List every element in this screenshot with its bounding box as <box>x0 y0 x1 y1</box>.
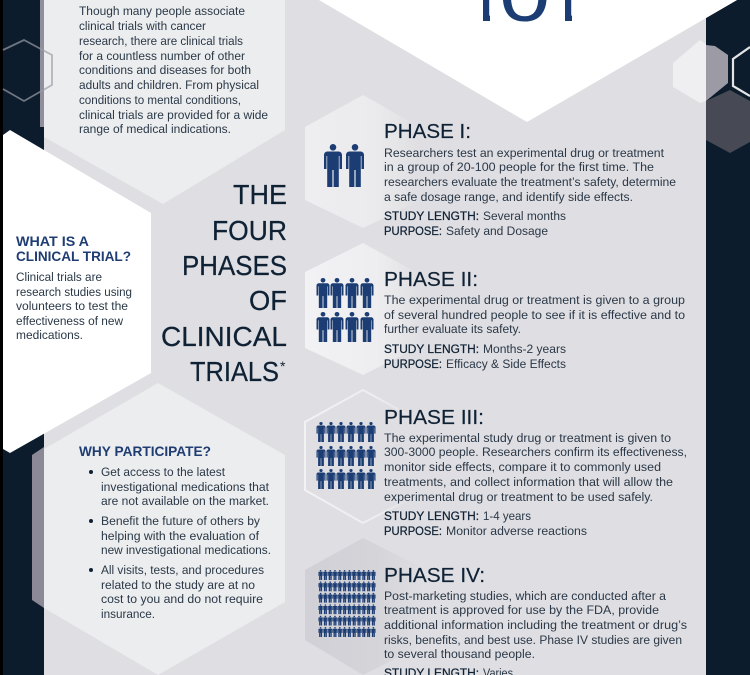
panel: why participate hexagon <box>44 383 285 675</box>
text block: phase IV: risks, benefits, and best use. Phase IV studies are given <box>384 633 682 647</box>
text block: phase III: experimental drug or treatment to be used safely. <box>384 490 653 504</box>
text block: phase I: in a group of 20-100 people for the first time. The <box>384 160 654 174</box>
text block: phase II: further evaluate its safety. <box>384 322 521 336</box>
text block: why participate: helping with the evaluation of <box>101 529 260 543</box>
icon: eight people <box>316 278 374 342</box>
text block: intro: range of medical indications. <box>79 122 231 136</box>
left edge strip <box>0 0 3 675</box>
decorative hexagon: outline right <box>733 47 750 96</box>
panel: intro hexagon <box>44 0 285 204</box>
side strip: why participate <box>32 447 44 608</box>
section heading: the four phases: THE <box>233 179 287 210</box>
text block: phase III: 1-4 years <box>483 509 531 523</box>
text block: phase I: Researchers test an experimental drug or treatment <box>384 146 665 160</box>
text block: why participate: cost to you and do not require <box>101 592 263 606</box>
text block: intro: clinical trials are provided for a wide <box>79 108 268 122</box>
text block: phase II: STUDY LENGTH: <box>384 342 479 356</box>
text block: intro: conditions to mental conditions, <box>79 93 241 107</box>
decorative hexagon: dark right <box>706 90 750 153</box>
hexagon: phase IV <box>305 538 423 675</box>
text block: intro: Though many people associate <box>79 4 245 18</box>
text block: phase IV <box>384 564 687 675</box>
text block: why participate: WHY PARTICIPATE? <box>79 443 211 459</box>
text block: phase I: PURPOSE: <box>384 224 442 238</box>
decorative hexagon: light top right <box>673 40 706 103</box>
hexagon: phase II <box>305 243 423 375</box>
icon: eighteen people <box>316 422 376 489</box>
text block: phase IV: Post-marketing studies, which are conducted after a <box>384 589 666 603</box>
right navy band <box>706 0 750 675</box>
text block: intro <box>79 4 268 136</box>
text block: phase I: PHASE I: <box>384 120 471 143</box>
text block: intro: for a countless number of other <box>79 49 245 63</box>
section heading: the four phases: OF <box>249 285 287 316</box>
section heading: the four phases: * <box>280 358 286 374</box>
text block: phase III: PHASE III: <box>384 406 484 429</box>
text block: phase IV: additional information including the treatment or drug’s <box>384 618 687 632</box>
text block: phase III: PURPOSE: <box>384 524 442 538</box>
hexagon: phase III <box>305 390 423 523</box>
panel: what is a clinical trial hexagon <box>3 130 151 453</box>
text block: phase II: Efficacy & Side Effects <box>446 357 566 371</box>
text block: phase II: Months-2 years <box>483 342 566 356</box>
text block: phase III: The experimental study drug or treatment is given to <box>384 431 671 445</box>
text block: what is a clinical trial: Clinical trials are <box>16 270 102 284</box>
text block: what is a clinical trial: WHAT IS A <box>16 233 89 249</box>
text block: phase IV: PHASE IV: <box>384 564 485 587</box>
text block: phase IV: treatment is approved for use by the FDA, provide <box>384 603 659 617</box>
text block: phase I: STUDY LENGTH: <box>384 209 479 223</box>
text block: why participate: All visits, tests, and procedures <box>101 563 264 577</box>
text block: what is a clinical trial: research studies using <box>16 285 132 299</box>
text block: phase I: researchers evaluate the treatment’s safety, determine <box>384 175 676 189</box>
text block: phase III <box>384 406 687 538</box>
text block: what is a clinical trial: CLINICAL TRIAL? <box>16 248 131 264</box>
decorative hexagon: gray top right <box>706 45 728 101</box>
text block: phase II: PHASE II: <box>384 268 478 291</box>
text block: phase II: of several hundred people to see if it is effective and to <box>384 308 685 322</box>
text block: intro: research, there are clinical trials <box>79 34 243 48</box>
text block: why participate <box>79 443 271 621</box>
text block: phase I: a safe dosage range, and identify side effects. <box>384 190 633 204</box>
text block: phase III: STUDY LENGTH: <box>384 509 479 523</box>
hexagon: phase I <box>305 95 421 228</box>
text block: what is a clinical trial <box>16 233 132 342</box>
white hexagon: title area <box>319 0 737 122</box>
text block: what is a clinical trial: effectiveness of new <box>16 314 123 328</box>
section heading: the four phases <box>161 179 287 387</box>
text block: phase II: The experimental drug or treatment is given to a group <box>384 293 685 307</box>
text block: why participate: Get access to the latest <box>101 465 226 479</box>
text block: intro: conditions and diseases for both <box>79 63 251 77</box>
section heading: the four phases: TRIALS <box>190 356 279 387</box>
text block: phase I: Several months <box>483 209 566 223</box>
text block: phase I <box>384 120 676 238</box>
text block: why participate: Benefit the future of others by <box>101 514 261 528</box>
section heading: the four phases: FOUR <box>212 215 287 246</box>
text block: phase III: Monitor adverse reactions <box>446 524 587 538</box>
text block: why participate: are not available on the market. <box>101 494 269 508</box>
text block: phase III: treatments, and collect information that will allow the <box>384 475 673 489</box>
text block: intro: clinical trials with cancer <box>79 19 206 33</box>
text block: phase III: 300-3000 people. Researchers confirm its effectiveness, <box>384 445 687 459</box>
text block: why participate: related to the study are at no <box>101 578 255 592</box>
decorative hexagon: outline left <box>3 40 52 101</box>
text block: why participate: new investigational medications. <box>101 543 271 557</box>
text block: what is a clinical trial: medications. <box>16 328 83 342</box>
icon: two people <box>324 144 364 187</box>
text block: phase IV: to several thousand people. <box>384 647 535 661</box>
left navy band <box>0 0 44 675</box>
side strip: top left <box>40 0 44 127</box>
text block: why participate: investigational medications that <box>101 480 270 494</box>
text block: phase I: Safety and Dosage <box>446 224 548 238</box>
text block: what is a clinical trial: volunteers to test the <box>16 299 128 313</box>
text block: phase III: monitor side effects, compare it to commonly used <box>384 460 661 474</box>
section heading: the four phases: CLINICAL <box>161 321 287 352</box>
section heading: the four phases: PHASES <box>182 250 287 281</box>
icon: many people <box>318 570 376 637</box>
text block: phase II <box>384 268 685 371</box>
text block: why participate: insurance. <box>101 607 155 621</box>
text block: phase II: PURPOSE: <box>384 357 442 371</box>
title number <box>483 0 572 22</box>
text block: intro: adults and children. From physical <box>79 78 259 92</box>
